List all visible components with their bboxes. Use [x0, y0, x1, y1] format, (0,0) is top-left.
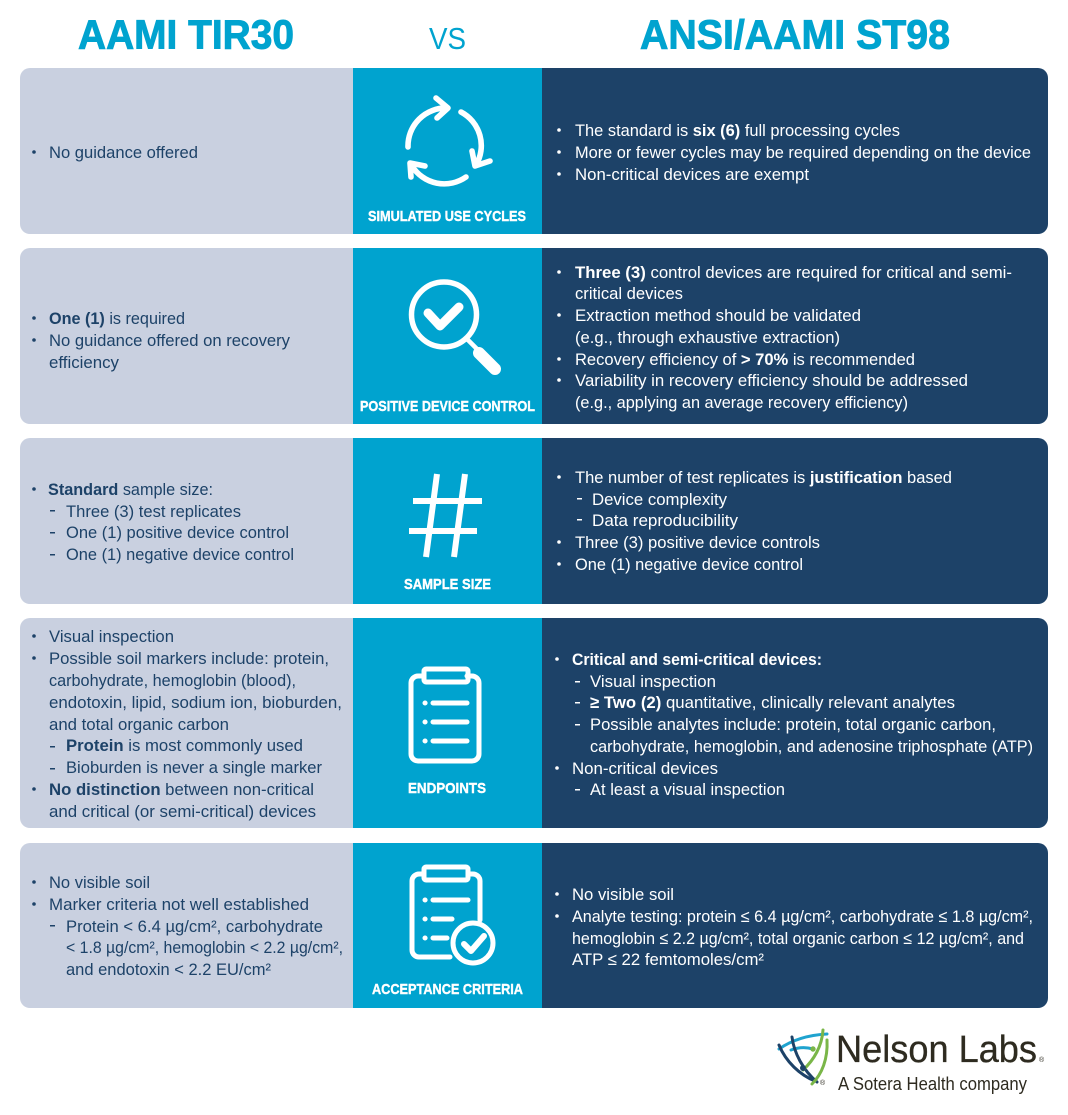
row: sample size	[20, 438, 1048, 604]
panel: ST98 acceptance criteria: No visible soil	[572, 885, 674, 904]
label: simulated use cycles: SIMULATED USE CYCLES	[368, 208, 526, 225]
icon: clipboard checklist	[411, 669, 479, 761]
panel: ST98 sample size: Device complexity	[592, 490, 727, 509]
panel: acceptance criteria category	[353, 843, 542, 1008]
row: simulated use cycles	[20, 68, 1048, 234]
icon: Nelson Labs globe mark	[779, 1030, 827, 1084]
panel: ST98 positive device control: Variability in recovery efficiency should be addressed	[575, 371, 968, 390]
panel: TIR30 endpoints: endotoxin, lipid, sodium ion, bioburden,	[49, 693, 342, 712]
panel: ST98 endpoints: carbohydrate, hemoglobin, and adenosine triphosphate (ATP)	[590, 737, 1033, 756]
panel: positive device control category	[353, 248, 542, 424]
panel: ST98 sample size: Data reproducibility	[592, 511, 738, 530]
panel: TIR30 endpoints: Bioburden is never a single marker	[66, 758, 322, 777]
panel: TIR30 endpoints	[20, 618, 353, 828]
label: sample size: SAMPLE SIZE	[404, 576, 491, 593]
panel: TIR30 endpoints: carbohydrate, hemoglobin (blood),	[49, 671, 296, 690]
row: endpoints	[20, 618, 1048, 828]
panel: TIR30 acceptance criteria	[20, 843, 353, 1008]
panel: TIR30 positive device control: No guidance offered on recovery	[49, 331, 290, 350]
panel: TIR30 positive device control	[20, 248, 353, 424]
icon: hash sign	[409, 474, 482, 557]
panel: simulated use cycles category	[353, 68, 542, 234]
panel: ST98 endpoints: Possible analytes include: protein, total organic carbon,	[590, 715, 996, 734]
panel: ST98 positive device control	[542, 248, 1048, 424]
panel: ST98 sample size: Three (3) positive device controls	[575, 533, 820, 552]
tagline: A Sotera Health company: A Sotera Health company	[838, 1074, 1027, 1094]
panel: ST98 endpoints: ≥ Two (2) quantitative, clinically relevant analytes	[590, 693, 955, 712]
panel: ST98 acceptance criteria: ATP ≤ 22 femtomoles/cm²	[572, 950, 764, 969]
panel: ST98 positive device control: Three (3) control devices are required for critical and semi-	[575, 263, 1012, 282]
title: VS: VS	[429, 21, 466, 56]
label: endpoints: ENDPOINTS	[408, 780, 486, 797]
icon: recycling arrows	[408, 98, 490, 184]
panel: TIR30 simulated use cycles	[20, 68, 353, 234]
panel: ST98 simulated use cycles: Non-critical devices are exempt	[575, 165, 809, 184]
panel: TIR30 acceptance criteria: No visible soil	[49, 873, 150, 892]
panel: TIR30 acceptance criteria: < 1.8 µg/cm², hemoglobin < 2.2 µg/cm²,	[66, 938, 343, 957]
panel: TIR30 endpoints: and total organic carbon	[49, 715, 229, 734]
panel: TIR30 endpoints: and critical (or semi-critical) devices	[49, 802, 316, 821]
panel: TIR30 positive device control: efficiency	[49, 353, 119, 372]
mark: registered symbol on globe: ®	[820, 1079, 826, 1087]
panel: ST98 sample size: The number of test replicates is justification based	[575, 468, 952, 487]
mark: registered symbol: ®	[1039, 1056, 1045, 1064]
label: positive device control: POSITIVE DEVICE CONTROL	[360, 398, 535, 415]
panel: ST98 simulated use cycles: More or fewer cycles may be required depending on the device	[575, 143, 1031, 162]
panel: TIR30 sample size: One (1) negative device control	[66, 545, 294, 564]
wordmark: Nelson Labs: Nelson Labs	[836, 1029, 1037, 1071]
panel: ST98 acceptance criteria: hemoglobin ≤ 2.2 µg/cm², total organic carbon ≤ 12 µg/cm², and	[572, 929, 1024, 948]
panel: ST98 endpoints: Visual inspection	[590, 672, 716, 691]
title: AAMI TIR30: AAMI TIR30	[78, 12, 294, 58]
panel: TIR30 simulated use cycles: No guidance offered	[49, 143, 198, 162]
panel: TIR30 sample size: Standard sample size:	[48, 480, 213, 499]
panel: TIR30 endpoints: No distinction between non-critical	[49, 780, 314, 799]
panel: TIR30 sample size: Three (3) test replicates	[66, 502, 241, 521]
panel: ST98 simulated use cycles: The standard is six (6) full processing cycles	[575, 121, 900, 140]
icon: clipboard with check badge	[412, 867, 493, 963]
panel: ST98 acceptance criteria: Analyte testing: protein ≤ 6.4 µg/cm², carbohydrate ≤ 1.8 µg/cm²,	[572, 907, 1033, 926]
logo: Nelson Labs	[779, 1029, 1045, 1094]
panel: TIR30 acceptance criteria: Protein < 6.4 µg/cm², carbohydrate	[66, 917, 323, 936]
panel: TIR30 endpoints: Protein is most commonly used	[66, 736, 303, 755]
panel: TIR30 acceptance criteria: Marker criteria not well established	[49, 895, 309, 914]
panel: ST98 positive device control: critical devices	[575, 284, 683, 303]
panel: ST98 sample size	[542, 438, 1048, 604]
panel: ST98 positive device control: Recovery efficiency of > 70% is recommended	[575, 350, 915, 369]
panel: ST98 positive device control: Extraction method should be validated	[575, 306, 861, 325]
label: acceptance criteria: ACCEPTANCE CRITERIA	[372, 981, 523, 998]
panel: TIR30 endpoints: Visual inspection	[49, 627, 174, 646]
panel: ST98 endpoints	[542, 618, 1048, 828]
panel: endpoints category	[353, 618, 542, 828]
panel: TIR30 endpoints: Possible soil markers include: protein,	[49, 649, 329, 668]
row: positive device control	[20, 248, 1048, 424]
panel: ST98 simulated use cycles	[542, 68, 1048, 234]
panel: TIR30 sample size	[20, 438, 353, 604]
panel: ST98 acceptance criteria	[542, 843, 1048, 1008]
title: ANSI/AAMI ST98: ANSI/AAMI ST98	[640, 12, 950, 58]
panel: ST98 endpoints: Critical and semi-critical devices:	[572, 650, 822, 669]
panel: TIR30 sample size: One (1) positive device control	[66, 523, 289, 542]
panel: TIR30 acceptance criteria: and endotoxin < 2.2 EU/cm²	[66, 960, 271, 979]
icon: magnifying glass with check	[412, 282, 495, 369]
panel: sample size category	[353, 438, 542, 604]
row: acceptance criteria	[20, 843, 1048, 1008]
panel: ST98 sample size: One (1) negative device control	[575, 555, 803, 574]
panel: TIR30 positive device control: One (1) is required	[49, 309, 185, 328]
panel: ST98 positive device control: (e.g., applying an average recovery efficiency)	[575, 393, 908, 412]
panel: ST98 endpoints: At least a visual inspection	[590, 780, 785, 799]
panel: ST98 endpoints: Non-critical devices	[572, 759, 718, 778]
panel: ST98 positive device control: (e.g., through exhaustive extraction)	[575, 328, 840, 347]
